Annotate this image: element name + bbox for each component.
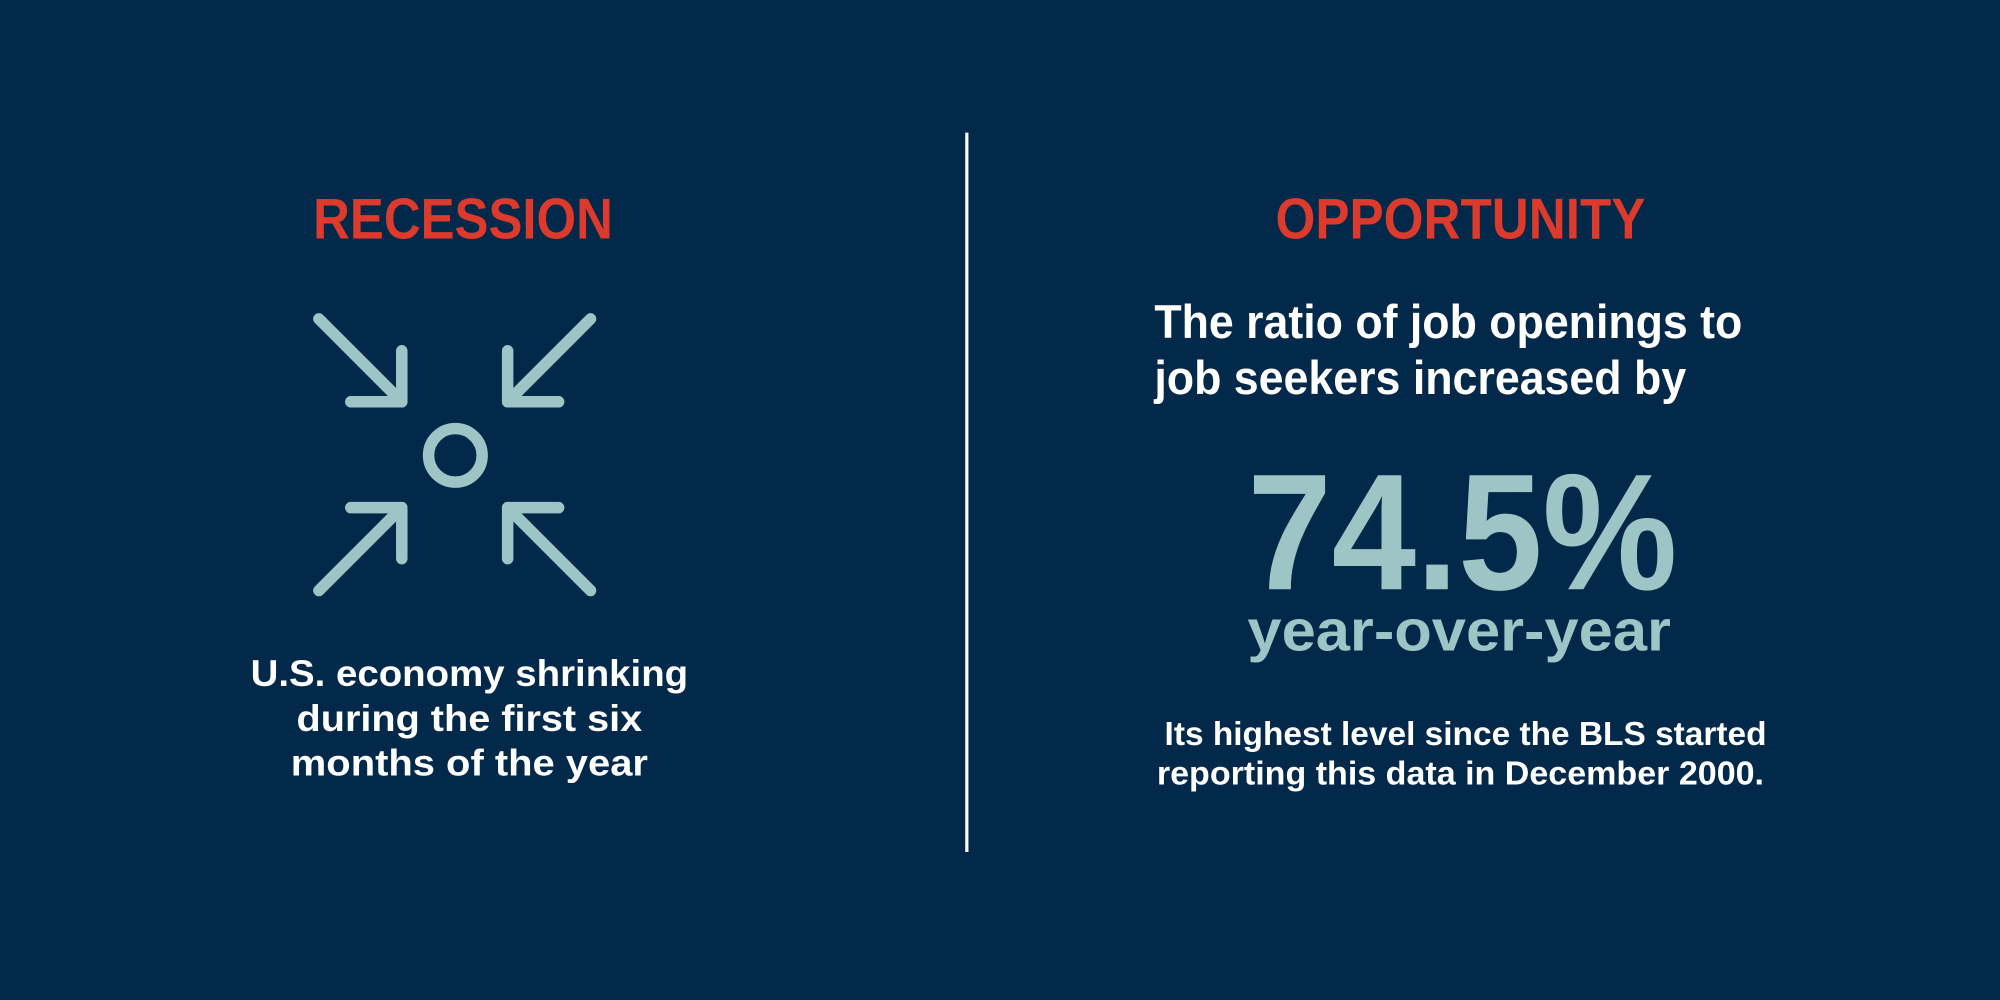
text block: ratio statement bbox=[1153, 296, 1742, 405]
text block: recession description bbox=[251, 653, 688, 784]
heading: opportunity: OPPORTUNITY bbox=[1276, 188, 1645, 252]
text block: recession description: U.S. economy shrinking bbox=[251, 653, 688, 694]
big number: 74.5%: 74.5% bbox=[1247, 440, 1677, 625]
text block: ratio statement: The ratio of job openings to bbox=[1154, 296, 1742, 349]
text block: footnote: reporting this data in December 2000. bbox=[1157, 755, 1764, 792]
heading: recession: RECESSION bbox=[313, 188, 613, 252]
icon: arrows converging on circle bbox=[319, 319, 591, 591]
label: year-over-year: year-over-year bbox=[1247, 599, 1671, 664]
text block: recession description: months of the year bbox=[291, 743, 648, 784]
panel: opportunity bbox=[1153, 188, 1767, 792]
text block: footnote bbox=[1157, 716, 1767, 792]
text block: ratio statement: job seekers increased by bbox=[1153, 352, 1686, 405]
text block: recession description: during the first six bbox=[297, 698, 643, 739]
panel: recession bbox=[251, 188, 688, 784]
text block: footnote: Its highest level since the BLS started bbox=[1165, 716, 1767, 753]
